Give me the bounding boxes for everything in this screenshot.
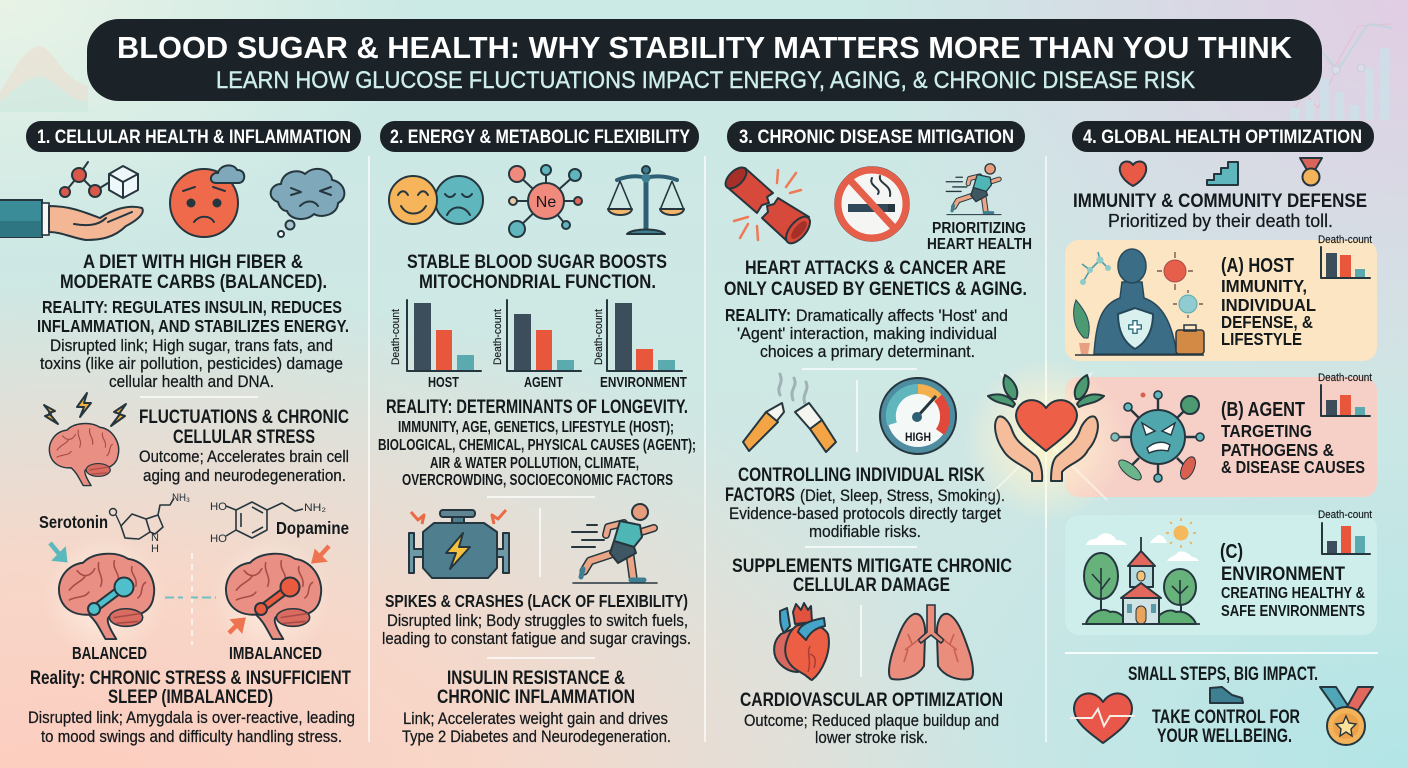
text: host bbox=[1221, 255, 1316, 349]
card: environment bbox=[1065, 509, 1377, 635]
mini chart: environment: Death-count bbox=[1318, 509, 1372, 521]
text: insulin resistance: Link; Accelerates weight gain and drives bbox=[403, 709, 668, 728]
text: spikes and crashes bbox=[382, 591, 691, 648]
text: stress reality bbox=[28, 667, 355, 746]
bar chart: environment: Death-count bbox=[593, 309, 605, 365]
icon: virus and germs bbox=[1111, 391, 1204, 483]
text: cardiovascular optimization bbox=[740, 689, 1003, 747]
text: spikes and crashes: Disrupted link; Body struggles to switch fuels, bbox=[387, 611, 688, 630]
icon: hand holding molecule and sugar cube bbox=[0, 162, 143, 240]
dopamine label and molecule: HO bbox=[210, 501, 227, 513]
icon: broken artery bbox=[722, 164, 814, 247]
text: mitochondrial bbox=[407, 251, 667, 293]
icon: gold medal bbox=[1320, 687, 1373, 745]
icon: medal bbox=[1300, 158, 1322, 186]
section heading 3: 3. CHRONIC DISEASE MITIGATION bbox=[739, 127, 1014, 148]
text: environment: ENVIRONMENT bbox=[1221, 563, 1345, 585]
icon: broken cigarette bbox=[743, 374, 836, 452]
text: spikes and crashes: leading to constant fatigue and sugar cravings. bbox=[382, 629, 691, 648]
text: fluctuations and stress: CELLULAR STRESS bbox=[173, 426, 315, 448]
text: insulin resistance: CHRONIC INFLAMMATION bbox=[437, 686, 635, 708]
bar chart: agent bbox=[492, 300, 581, 391]
section heading 4: 4. GLOBAL HEALTH OPTIMIZATION bbox=[1083, 127, 1362, 148]
text: agent: (B) AGENT bbox=[1221, 399, 1305, 421]
text: determinants of longevity: BIOLOGICAL, CHEMICAL, PHYSICAL CAUSES (AGENT); bbox=[378, 437, 696, 454]
section heading 3 bbox=[727, 121, 1025, 152]
icon: thought cloud bbox=[271, 169, 344, 237]
icon: heart with pulse bbox=[1070, 693, 1135, 743]
text: cardiovascular optimization: Outcome; Reduced plaque buildup and bbox=[744, 711, 999, 730]
text: immunity and community defense: Prioritized by their death toll. bbox=[1108, 211, 1333, 231]
text: stress reality: Reality: CHRONIC STRESS & INSUFFICIENT bbox=[30, 667, 351, 689]
panel: global health optimization bbox=[1065, 121, 1378, 747]
text: diet reality: toxins (like air pollution, pesticides) damage bbox=[40, 354, 343, 373]
panel: energy and metabolic flexibility bbox=[378, 121, 699, 746]
text: diet myth bbox=[60, 251, 327, 293]
section heading 2: 2. ENERGY & METABOLIC FLEXIBILITY bbox=[390, 127, 690, 148]
text: environment: CREATING HEALTHY & bbox=[1221, 585, 1365, 602]
balanced and imbalanced labels: IMBALANCED bbox=[229, 643, 322, 663]
text: diet reality: cellular health and DNA. bbox=[109, 372, 274, 391]
text: host and agent reality: Dramatically affects 'Host' and bbox=[796, 306, 1008, 325]
text: mitochondrial: STABLE BLOOD SUGAR BOOSTS bbox=[407, 251, 667, 273]
text: cardiovascular optimization: lower stroke risk. bbox=[815, 728, 928, 747]
text: controlling risk factors: (Diet, Sleep, Stress, Smoking). bbox=[800, 486, 1005, 505]
text: heart attacks myth: ONLY CAUSED BY GENETICS & AGING. bbox=[724, 278, 1027, 300]
text: insulin resistance bbox=[402, 667, 671, 746]
icon: running shoe bbox=[1210, 687, 1243, 703]
bar chart: host bbox=[390, 300, 481, 391]
bar chart: agent: Death-count bbox=[492, 309, 504, 365]
icon: person with shield bbox=[1074, 249, 1204, 355]
text: environment: (C) bbox=[1220, 541, 1243, 563]
mini chart: agent bbox=[1318, 372, 1372, 416]
text: determinants of longevity: OVERCROWDING, SOCIOECONOMIC FACTORS bbox=[402, 472, 673, 489]
icon: anatomical heart bbox=[774, 603, 829, 680]
text: host: DEFENSE, & bbox=[1221, 312, 1313, 332]
text: host and agent reality: REALITY: bbox=[725, 305, 791, 325]
text: heart attacks myth bbox=[724, 257, 1027, 300]
text: take control: YOUR WELLBEING. bbox=[1157, 725, 1292, 747]
serotonin label and molecule bbox=[39, 492, 190, 555]
card: agent bbox=[1065, 372, 1377, 497]
text: supplements: CELLULAR DAMAGE bbox=[793, 574, 950, 596]
icon: church trees and sun bbox=[1082, 518, 1200, 624]
title banner bbox=[87, 19, 1322, 101]
dopamine label and molecule: NH₂ bbox=[304, 502, 326, 514]
dopamine label and molecule: HO bbox=[210, 533, 227, 545]
text: cardiovascular optimization: CARDIOVASCULAR OPTIMIZATION bbox=[740, 689, 1003, 711]
section heading 4 bbox=[1072, 121, 1374, 152]
icon: runner bbox=[572, 504, 657, 583]
text: stress reality: to mood swings and difficulty handling stress. bbox=[41, 727, 342, 746]
bar chart: host: HOST bbox=[428, 374, 459, 391]
text: diet myth: MODERATE CARBS (BALANCED). bbox=[60, 271, 327, 293]
text: controlling risk factors: Evidence-based protocols directly target bbox=[729, 504, 1001, 523]
text: controlling risk factors: FACTORS bbox=[725, 484, 795, 506]
text: diet reality: INFLAMMATION, AND STABILIZES ENERGY. bbox=[37, 316, 349, 336]
subtitle: LEARN HOW GLUCOSE FLUCTUATIONS IMPACT ENERGY, AGING, & CHRONIC DISEASE RISK bbox=[216, 67, 1195, 94]
text: fluctuations and stress bbox=[139, 406, 349, 485]
text: stress reality: Disrupted link; Amygdala is over-reactive, leading bbox=[28, 708, 355, 727]
mini chart: host: Death-count bbox=[1318, 234, 1372, 246]
text: fluctuations and stress: FLUCTUATIONS & CHRONIC bbox=[139, 406, 349, 428]
bar chart: environment: ENVIRONMENT bbox=[600, 374, 687, 391]
text: agent: & DISEASE CAUSES bbox=[1221, 457, 1365, 477]
text: host: IMMUNITY, bbox=[1221, 276, 1307, 296]
text: determinants of longevity: AIR & WATER POLLUTION, CLIMATE, bbox=[430, 455, 639, 472]
balanced and imbalanced labels bbox=[72, 643, 322, 663]
icon: neurotransmitter molecule: Ne bbox=[536, 194, 556, 211]
icon: heart in caring hands with glow bbox=[964, 358, 1128, 528]
text: determinants of longevity: REALITY: DETERMINANTS OF LONGEVITY. bbox=[386, 396, 688, 418]
text: host and agent reality: choices a primary determinant. bbox=[760, 342, 975, 361]
mini chart: agent: Death-count bbox=[1318, 372, 1372, 384]
text: supplements: SUPPLEMENTS MITIGATE CHRONIC bbox=[732, 555, 1012, 577]
bar chart: agent: AGENT bbox=[524, 374, 563, 391]
column dividers bbox=[368, 156, 1047, 742]
text: spikes and crashes: SPIKES & CRASHES (LACK OF FLEXIBILITY) bbox=[385, 591, 688, 611]
panel: chronic disease mitigation bbox=[722, 121, 1032, 747]
text: take control: TAKE CONTROL FOR bbox=[1152, 706, 1300, 728]
bar chart: environment bbox=[593, 300, 687, 391]
text: immunity and community defense: IMMUNITY & COMMUNITY DEFENSE bbox=[1073, 190, 1367, 212]
dopamine label and molecule bbox=[210, 501, 349, 545]
icon: engine with lightning bbox=[409, 510, 509, 578]
text: host: (A) HOST bbox=[1221, 255, 1294, 277]
text: agent: PATHOGENS & bbox=[1221, 440, 1334, 460]
dopamine label and molecule: Dopamine bbox=[276, 518, 349, 538]
text: determinants of longevity: IMMUNITY, AGE, GENETICS, LIFESTYLE (HOST); bbox=[398, 419, 674, 436]
balanced and imbalanced labels: BALANCED bbox=[72, 643, 147, 663]
text: determinants of longevity bbox=[378, 396, 696, 489]
text: host and agent reality: 'Agent' interaction, making individual bbox=[737, 324, 997, 343]
icon: runner and label: HEART HEALTH bbox=[927, 236, 1032, 253]
background decoration: charts bbox=[0, 24, 1392, 120]
text: diet myth: A DIET WITH HIGH FIBER & bbox=[83, 251, 303, 273]
icon: stairs bbox=[1207, 162, 1238, 185]
text: controlling risk factors bbox=[725, 464, 1005, 541]
icon: neurotransmitter molecule bbox=[509, 165, 582, 237]
icon: no smoking sign bbox=[835, 167, 909, 241]
text: stress reality: SLEEP (IMBALANCED) bbox=[108, 686, 273, 708]
icon: stressed brain with lightning bbox=[44, 393, 126, 486]
text: host: LIFESTYLE bbox=[1221, 329, 1302, 349]
text: controlling risk factors: CONTROLLING INDIVIDUAL RISK bbox=[738, 464, 985, 486]
mini chart: environment bbox=[1318, 509, 1372, 554]
text: insulin resistance: Type 2 Diabetes and Neurodegeneration. bbox=[402, 727, 671, 746]
text: agent: TARGETING bbox=[1221, 421, 1312, 441]
text: immunity and community defense bbox=[1073, 190, 1367, 231]
mini chart: host bbox=[1318, 234, 1372, 278]
icon: balance scale bbox=[608, 166, 684, 234]
text: host: INDIVIDUAL bbox=[1221, 295, 1316, 315]
text: mitochondrial: MITOCHONDRIAL FUNCTION. bbox=[419, 271, 656, 293]
text: agent bbox=[1221, 399, 1365, 477]
text: diet reality: Disrupted link; High sugar, trans fats, and bbox=[50, 336, 333, 355]
bar chart: host: Death-count bbox=[390, 309, 402, 365]
icon: runner and label: PRIORITIZING bbox=[932, 220, 1026, 237]
icon: balanced brain bbox=[43, 535, 167, 659]
text: diet reality: REALITY: REGULATES INSULIN, REDUCES bbox=[42, 297, 342, 317]
serotonin label and molecule: Serotonin bbox=[39, 512, 108, 532]
text: take control bbox=[1152, 706, 1300, 747]
icon: runner and label bbox=[927, 164, 1032, 253]
serotonin label and molecule: H bbox=[151, 543, 159, 555]
icon: high blood pressure gauge bbox=[880, 378, 956, 454]
serotonin label and molecule: NH₃ bbox=[172, 492, 190, 504]
text: controlling risk factors: modifiable risks. bbox=[809, 522, 921, 541]
section heading 1 bbox=[26, 121, 361, 152]
text: diet reality bbox=[37, 297, 349, 391]
icon: happy and sad faces bbox=[389, 176, 483, 224]
text: environment: SAFE ENVIRONMENTS bbox=[1221, 603, 1365, 620]
section heading 1: 1. CELLULAR HEALTH & INFLAMMATION bbox=[37, 127, 351, 148]
section heading 2 bbox=[380, 121, 699, 152]
icon: heart bbox=[1120, 161, 1146, 186]
text: host and agent reality bbox=[725, 305, 1008, 361]
text: insulin resistance: INSULIN RESISTANCE & bbox=[447, 667, 625, 689]
panel: cellular health and inflammation bbox=[0, 121, 361, 746]
icon: worried face with cloud bbox=[170, 165, 244, 237]
text: small steps big impact: SMALL STEPS, BIG IMPACT. bbox=[1128, 663, 1318, 685]
icon: lungs bbox=[889, 605, 973, 679]
text: fluctuations and stress: aging and neurodegeneration. bbox=[143, 466, 346, 485]
icon: imbalanced brain bbox=[212, 537, 332, 657]
title: BLOOD SUGAR & HEALTH: WHY STABILITY MATTERS MORE THAN YOU THINK bbox=[117, 30, 1293, 65]
text: heart attacks myth: HEART ATTACKS & CANCER ARE bbox=[745, 257, 1006, 279]
text: fluctuations and stress: Outcome; Accelerates brain cell bbox=[139, 447, 349, 466]
icon: high blood pressure gauge: HIGH bbox=[905, 430, 931, 444]
card: host bbox=[1065, 234, 1377, 361]
text: environment bbox=[1220, 541, 1365, 620]
text: supplements bbox=[732, 555, 1012, 596]
serotonin label and molecule: N bbox=[151, 532, 159, 544]
